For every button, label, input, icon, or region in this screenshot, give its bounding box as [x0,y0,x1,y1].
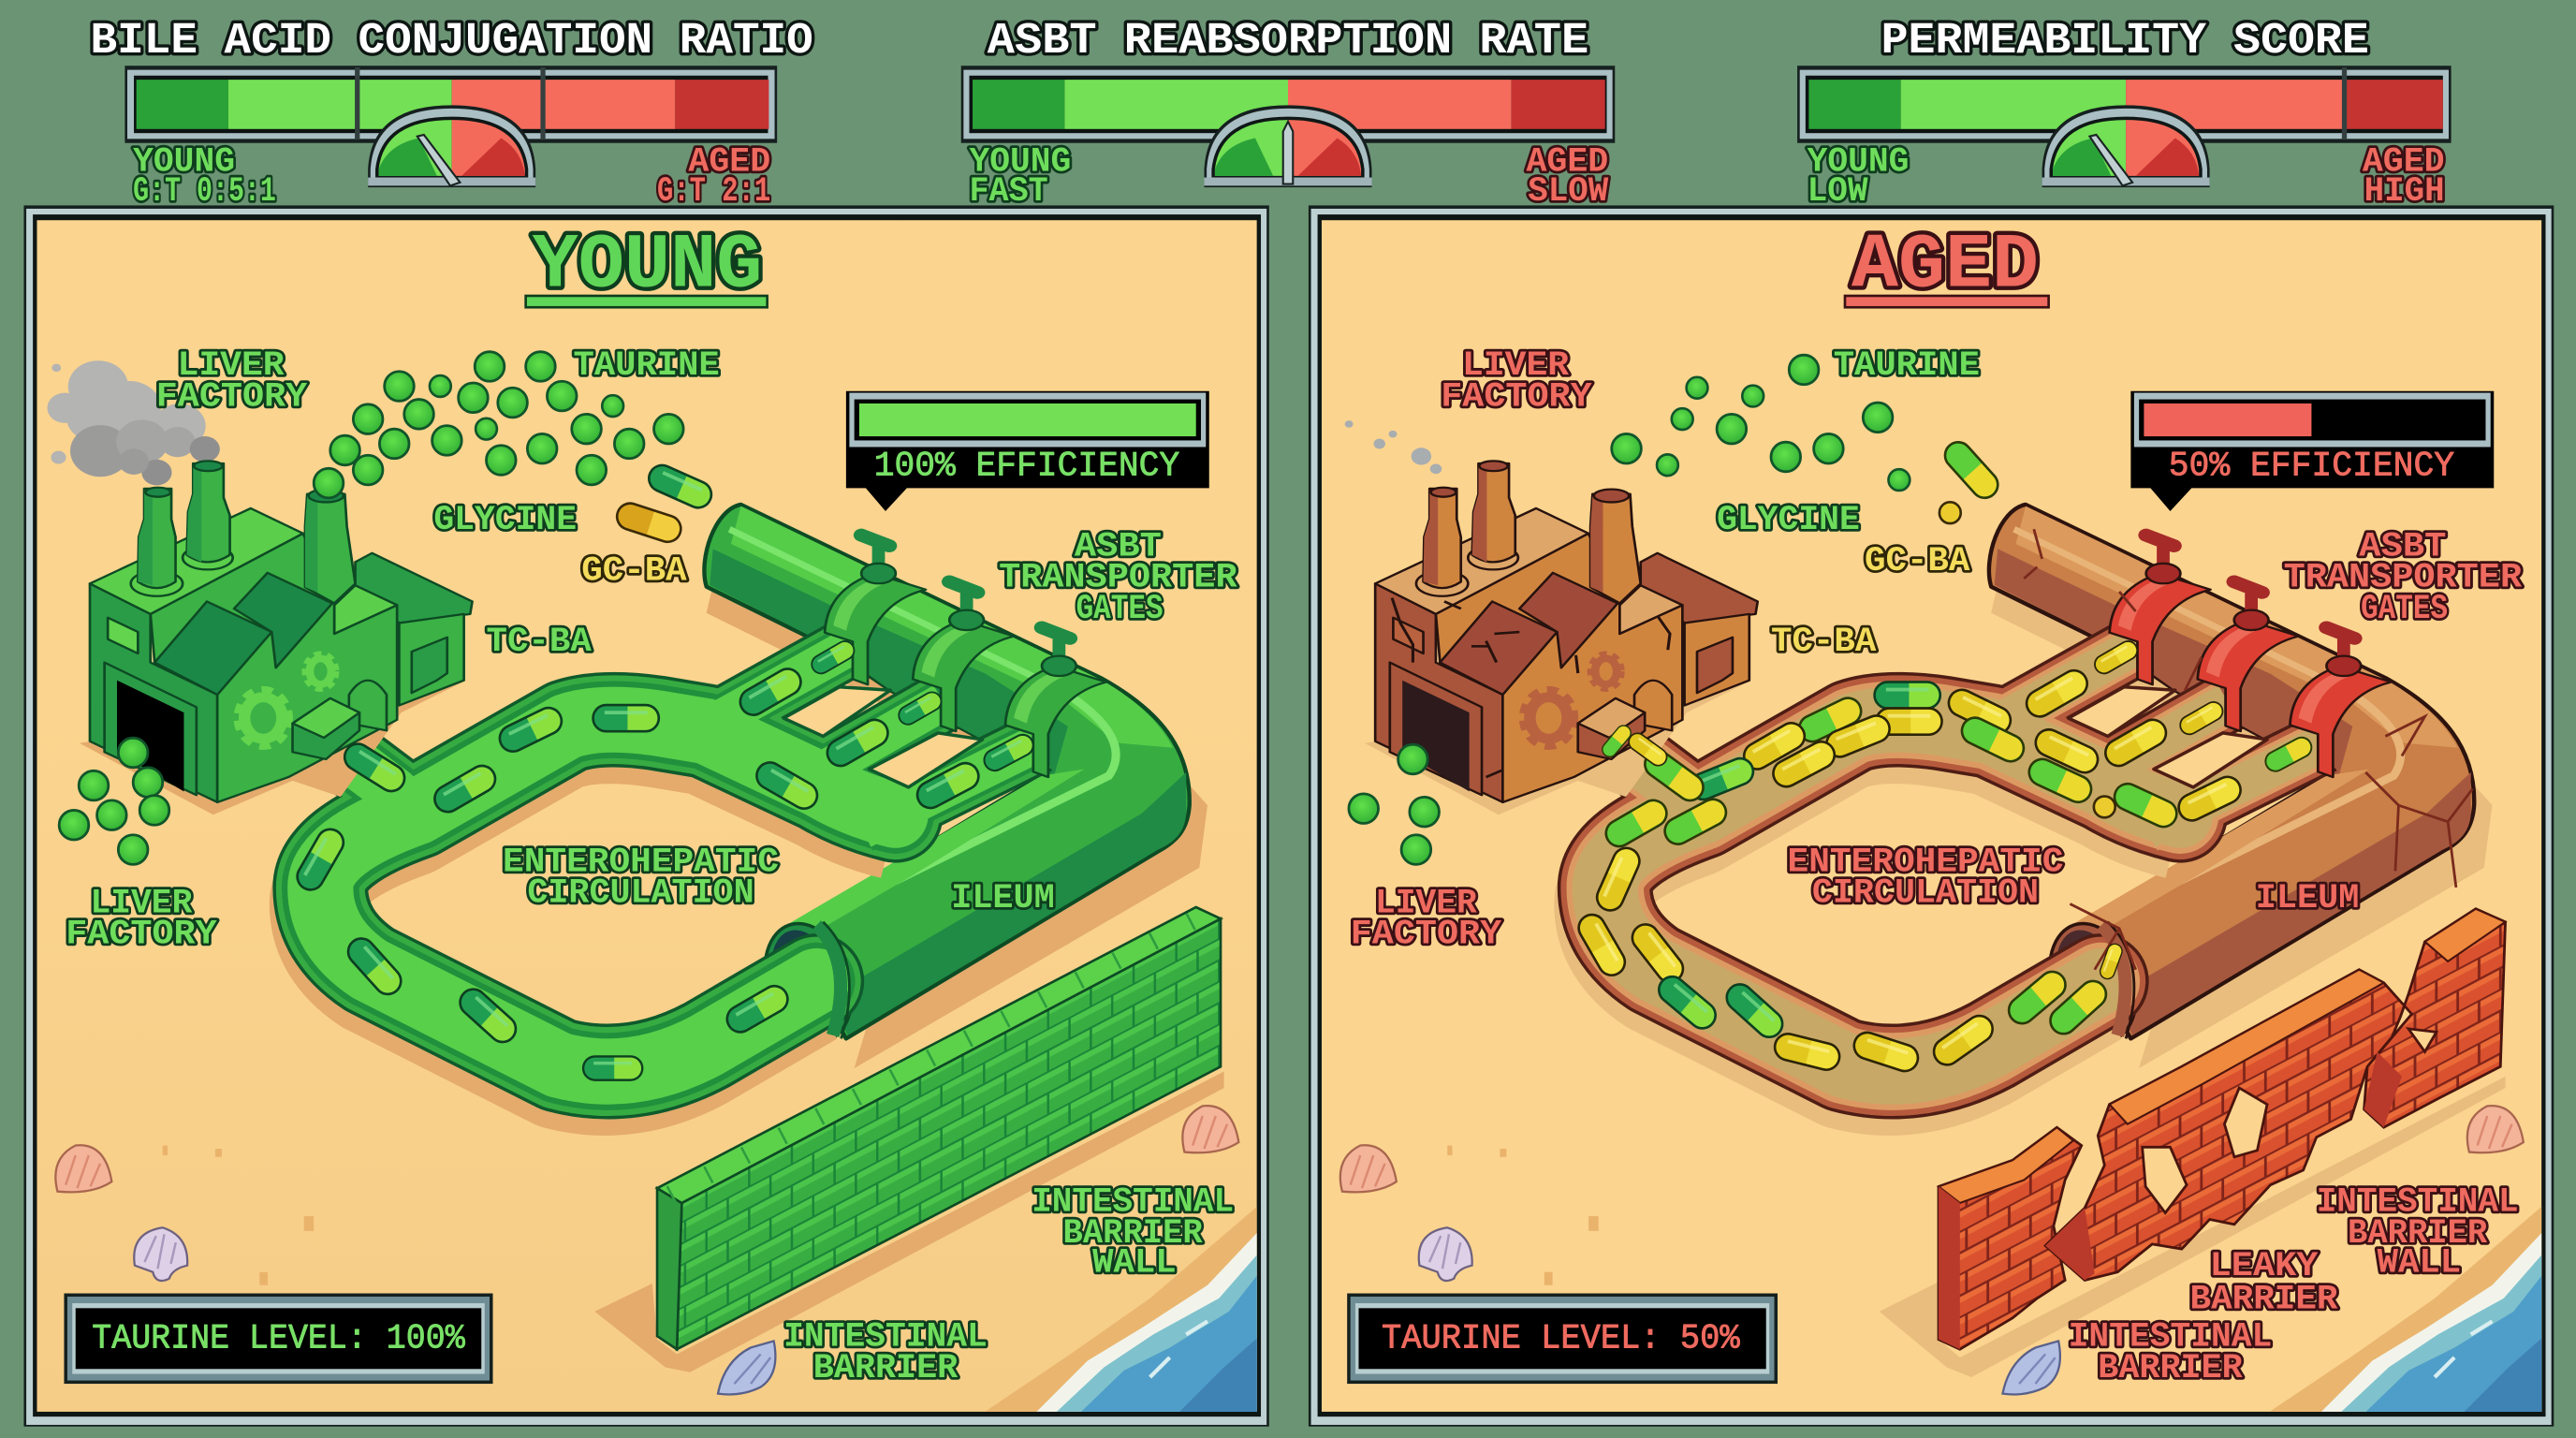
label: intestinal barrier wall: INTESTINAL [1032,1183,1234,1223]
label: enterohepatic circulation: ENTEROHEPATIC [1788,843,2063,882]
young label [1808,143,1909,212]
label: enterohepatic circulation [1788,843,2063,914]
pipe mouth lip [2101,922,2134,1038]
efficiency text: 100% EFFICIENCY [874,447,1179,486]
label: asbt transporter gates: GATES [2361,590,2448,629]
label: leaky barrier: LEAKY [2210,1247,2319,1286]
label: tc-ba: TC-BA [487,623,593,662]
shells [1340,1106,2524,1394]
aged label: SLOW [1528,172,1609,212]
label: liver factory [156,346,308,418]
label: ileum: ILEUM [2256,879,2359,918]
shells [55,1106,1238,1394]
sand specks [163,1146,314,1285]
liver factory [80,461,473,814]
label: liver factory: LIVER [1462,346,1570,386]
pipe mouth lip [816,922,849,1038]
efficiency callout [2130,391,2494,511]
label: asbt transporter gates: GATES [1076,590,1164,629]
young label: YOUNG [970,143,1071,183]
label: leaky barrier: BARRIER [2190,1280,2338,1319]
label: asbt transporter gates: TRANSPORTER [999,559,1238,598]
label: ileum: ILEUM [951,879,1055,918]
label: intestinal barrier: BARRIER [2098,1349,2244,1388]
meter heading: ASBT REABSORPTION RATE [988,17,1588,66]
young label: YOUNG [133,143,235,183]
aged label: AGED [2363,143,2445,183]
label: liver factory: FACTORY [156,378,308,418]
pipe cracks [2024,529,2472,970]
ileum pipe [704,505,1208,1068]
aged label [1526,143,1609,212]
label: glycine: GLYCINE [433,501,577,540]
gc-ba molecule and capsule [1939,437,2003,523]
sand specks [1447,1146,1599,1285]
label: asbt transporter gates [999,527,1238,629]
smoke wisp [1345,420,1442,474]
label: gc-ba: GC-BA [581,552,688,592]
label: asbt transporter gates: TRANSPORTER [2284,559,2523,598]
meter bar [1797,66,2452,143]
asbt gates [825,536,1106,777]
young label [970,143,1071,212]
taurine text: TAURINE LEVEL: 100% [92,1319,466,1358]
label: liver factory [1441,346,1593,418]
meter: bile acid conjugation ratio [91,17,813,212]
leaky intestinal barrier wall [1880,909,2506,1377]
label: liver factory: LIVER [178,346,285,386]
label: liver factory lower: LIVER [91,884,193,923]
factory cracks [1392,598,1670,777]
label: liver factory: FACTORY [1441,378,1593,418]
label: intestinal barrier wall: WALL [1092,1244,1177,1284]
aged label: HIGH [2364,172,2445,212]
label: asbt transporter gates: ASBT [2359,527,2446,566]
taurine molecules sparse [1612,355,1910,491]
label: intestinal barrier wall: WALL [2378,1244,2461,1284]
aged label: G:T 2:1 [657,172,770,212]
taurine level readout [64,1294,493,1384]
label: liver factory lower: FACTORY [1351,916,1502,955]
asbt gates red [2110,536,2391,777]
shoreline [2262,1199,2550,1416]
smoke [47,360,220,485]
label: enterohepatic circulation: ENTEROHEPATIC [503,843,779,882]
label: liver factory lower [66,884,218,955]
shoreline [977,1199,1265,1416]
ileum pipe cracked [1989,505,2492,1068]
taurine text: TAURINE LEVEL: 50% [1382,1319,1740,1358]
label: tc-ba: TC-BA [1771,623,1877,662]
taurine molecules [314,352,683,498]
taurine level readout [1347,1294,1778,1384]
panel: young [23,205,1269,1427]
label: taurine: TAURINE [574,346,720,386]
label: asbt transporter gates [2284,527,2523,629]
label: enterohepatic circulation: CIRCULATION [1812,874,2039,914]
label: liver factory lower: FACTORY [66,916,218,955]
label: intestinal barrier: INTESTINAL [783,1318,988,1357]
label: gc-ba: GC-BA [1865,542,1970,581]
meter bar [961,66,1615,143]
label: intestinal barrier [2069,1318,2272,1388]
meter heading: BILE ACID CONJUGATION RATIO [91,17,813,66]
label: glycine: GLYCINE [1717,501,1860,540]
label: intestinal barrier wall [1032,1183,1234,1284]
label: intestinal barrier wall: BARRIER [2348,1214,2488,1254]
enterohepatic channel depleted [1602,644,2323,1088]
efficiency bar fill [859,404,1196,436]
young label [133,143,276,212]
label: intestinal barrier wall [2317,1183,2519,1284]
aged label: AGED [688,143,770,183]
aged label [657,143,770,212]
label: asbt transporter gates: ASBT [1075,527,1162,566]
label: intestinal barrier: INTESTINAL [2069,1318,2272,1357]
meter: asbt reabsorption rate [961,17,1615,212]
label: intestinal barrier wall: BARRIER [1063,1214,1204,1254]
panel title: AGED [1852,221,2039,309]
bile acid capsules [293,461,1037,1080]
aged label: AGED [1526,143,1608,183]
meter: permeability score [1797,17,2452,212]
molecules near factory door [1349,744,1439,864]
enterohepatic channel [317,644,1038,1088]
meter bar [124,66,777,143]
label: intestinal barrier: BARRIER [813,1349,959,1388]
efficiency text: 50% EFFICIENCY [2169,447,2454,486]
young label: LOW [1808,172,1868,212]
label: liver factory lower [1351,884,1502,955]
label: leaky barrier [2190,1247,2338,1319]
efficiency callout [846,391,1209,511]
liver factory decayed [1365,461,1758,814]
label: liver factory lower: LIVER [1375,884,1478,923]
panel title: YOUNG [533,221,762,309]
bile acid capsules backlog [1574,638,2315,1075]
aged label [2363,143,2445,212]
efficiency bar fill [2144,404,2311,436]
gauge [368,105,535,187]
label: enterohepatic circulation [503,843,779,914]
young label: YOUNG [1808,143,1909,183]
panel frame [1309,205,2554,1427]
gauge [2042,105,2210,187]
young label: G:T 0:5:1 [133,172,276,212]
label: intestinal barrier wall: INTESTINAL [2317,1183,2519,1223]
panel frame [23,205,1269,1427]
label: taurine: TAURINE [1834,346,1980,386]
panel: aged [1309,205,2554,1427]
molecules leaving factory door [59,738,169,864]
label: intestinal barrier [783,1318,988,1388]
intestinal barrier wall [594,907,1224,1372]
gauge [1204,105,1372,187]
label: enterohepatic circulation: CIRCULATION [527,874,754,914]
meter heading: PERMEABILITY SCORE [1881,17,2369,66]
young label: FAST [970,172,1048,212]
